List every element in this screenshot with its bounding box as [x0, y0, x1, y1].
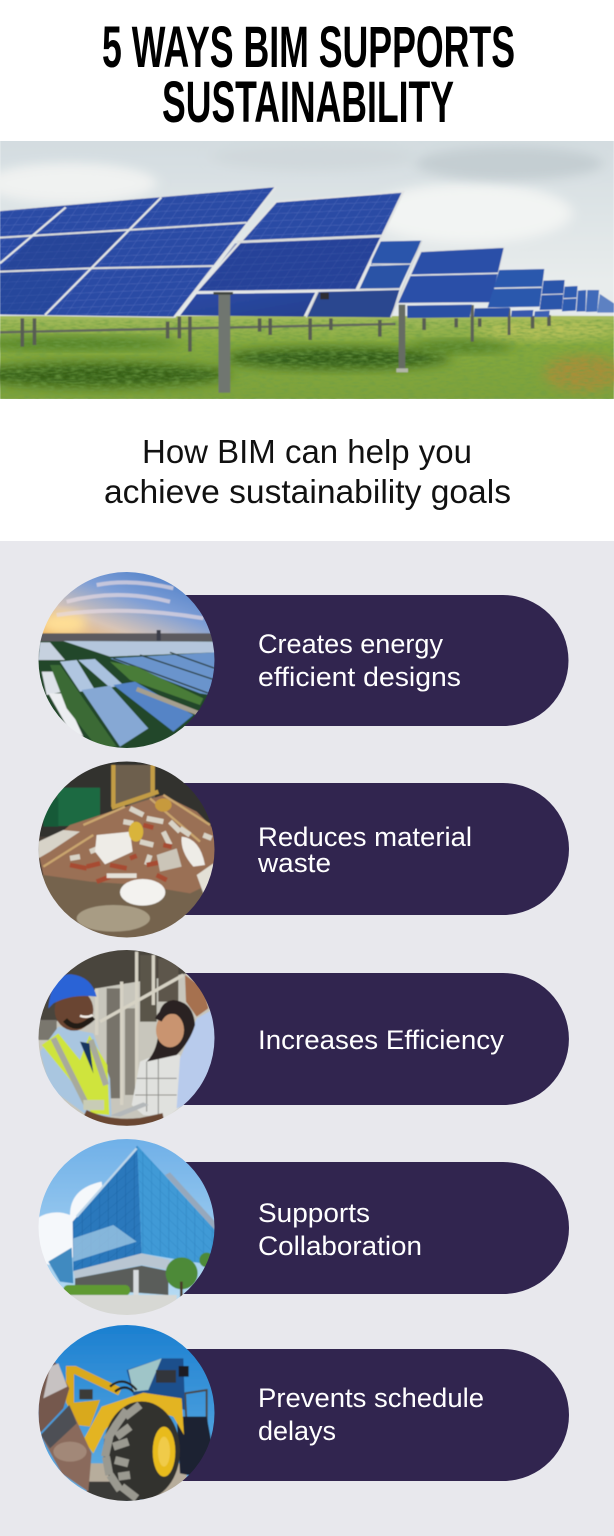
subtitle	[104, 433, 511, 510]
subtitle: How BIM can help you	[142, 433, 472, 470]
label 4: Supports	[258, 1198, 370, 1228]
item 2: reduces material waste	[37, 760, 569, 940]
item 4: supports collaboration: Collaboration	[258, 1231, 422, 1261]
tire	[103, 1401, 180, 1500]
label 5: Prevents schedule	[258, 1383, 484, 1413]
icon: construction waste photo	[37, 760, 218, 940]
label 3: Increases Efficiency	[258, 1025, 504, 1055]
pill 3	[150, 973, 569, 1105]
icon: glass office building photo	[37, 1138, 218, 1318]
label 2: Reduces material	[258, 822, 472, 852]
item 5: prevents schedule delays	[37, 1323, 569, 1503]
pill 1	[150, 595, 569, 726]
main posts	[219, 293, 230, 393]
main left array	[0, 187, 276, 317]
icon: engineer and colleague photo	[37, 948, 218, 1128]
title	[102, 15, 515, 135]
icon: wheel loader photo	[37, 1323, 218, 1503]
pill 4	[150, 1162, 569, 1294]
item 1: creates energy efficient designs	[37, 570, 569, 750]
subtitle: achieve sustainability goals	[104, 473, 511, 510]
item 2: reduces material waste: waste	[257, 848, 331, 878]
icon: solar field photo	[37, 570, 218, 750]
hands and tablet	[85, 1113, 163, 1122]
man	[40, 1027, 112, 1117]
woman	[132, 1054, 180, 1118]
item 5: prevents schedule delays: delays	[258, 1416, 336, 1446]
back rows	[180, 293, 315, 317]
back rail	[0, 324, 395, 332]
item 1: creates energy efficient designs: efficient designs	[258, 662, 461, 692]
panel: benefits list background	[0, 541, 614, 1536]
pill 2	[150, 783, 569, 915]
label 1: Creates energy	[258, 629, 443, 659]
hero photo: solar panel field	[0, 140, 614, 400]
item 4: supports collaboration	[37, 1138, 569, 1318]
bucket	[38, 1362, 69, 1435]
item 3: increases efficiency	[37, 948, 569, 1128]
pill 5	[150, 1349, 569, 1481]
main right array	[196, 192, 403, 292]
